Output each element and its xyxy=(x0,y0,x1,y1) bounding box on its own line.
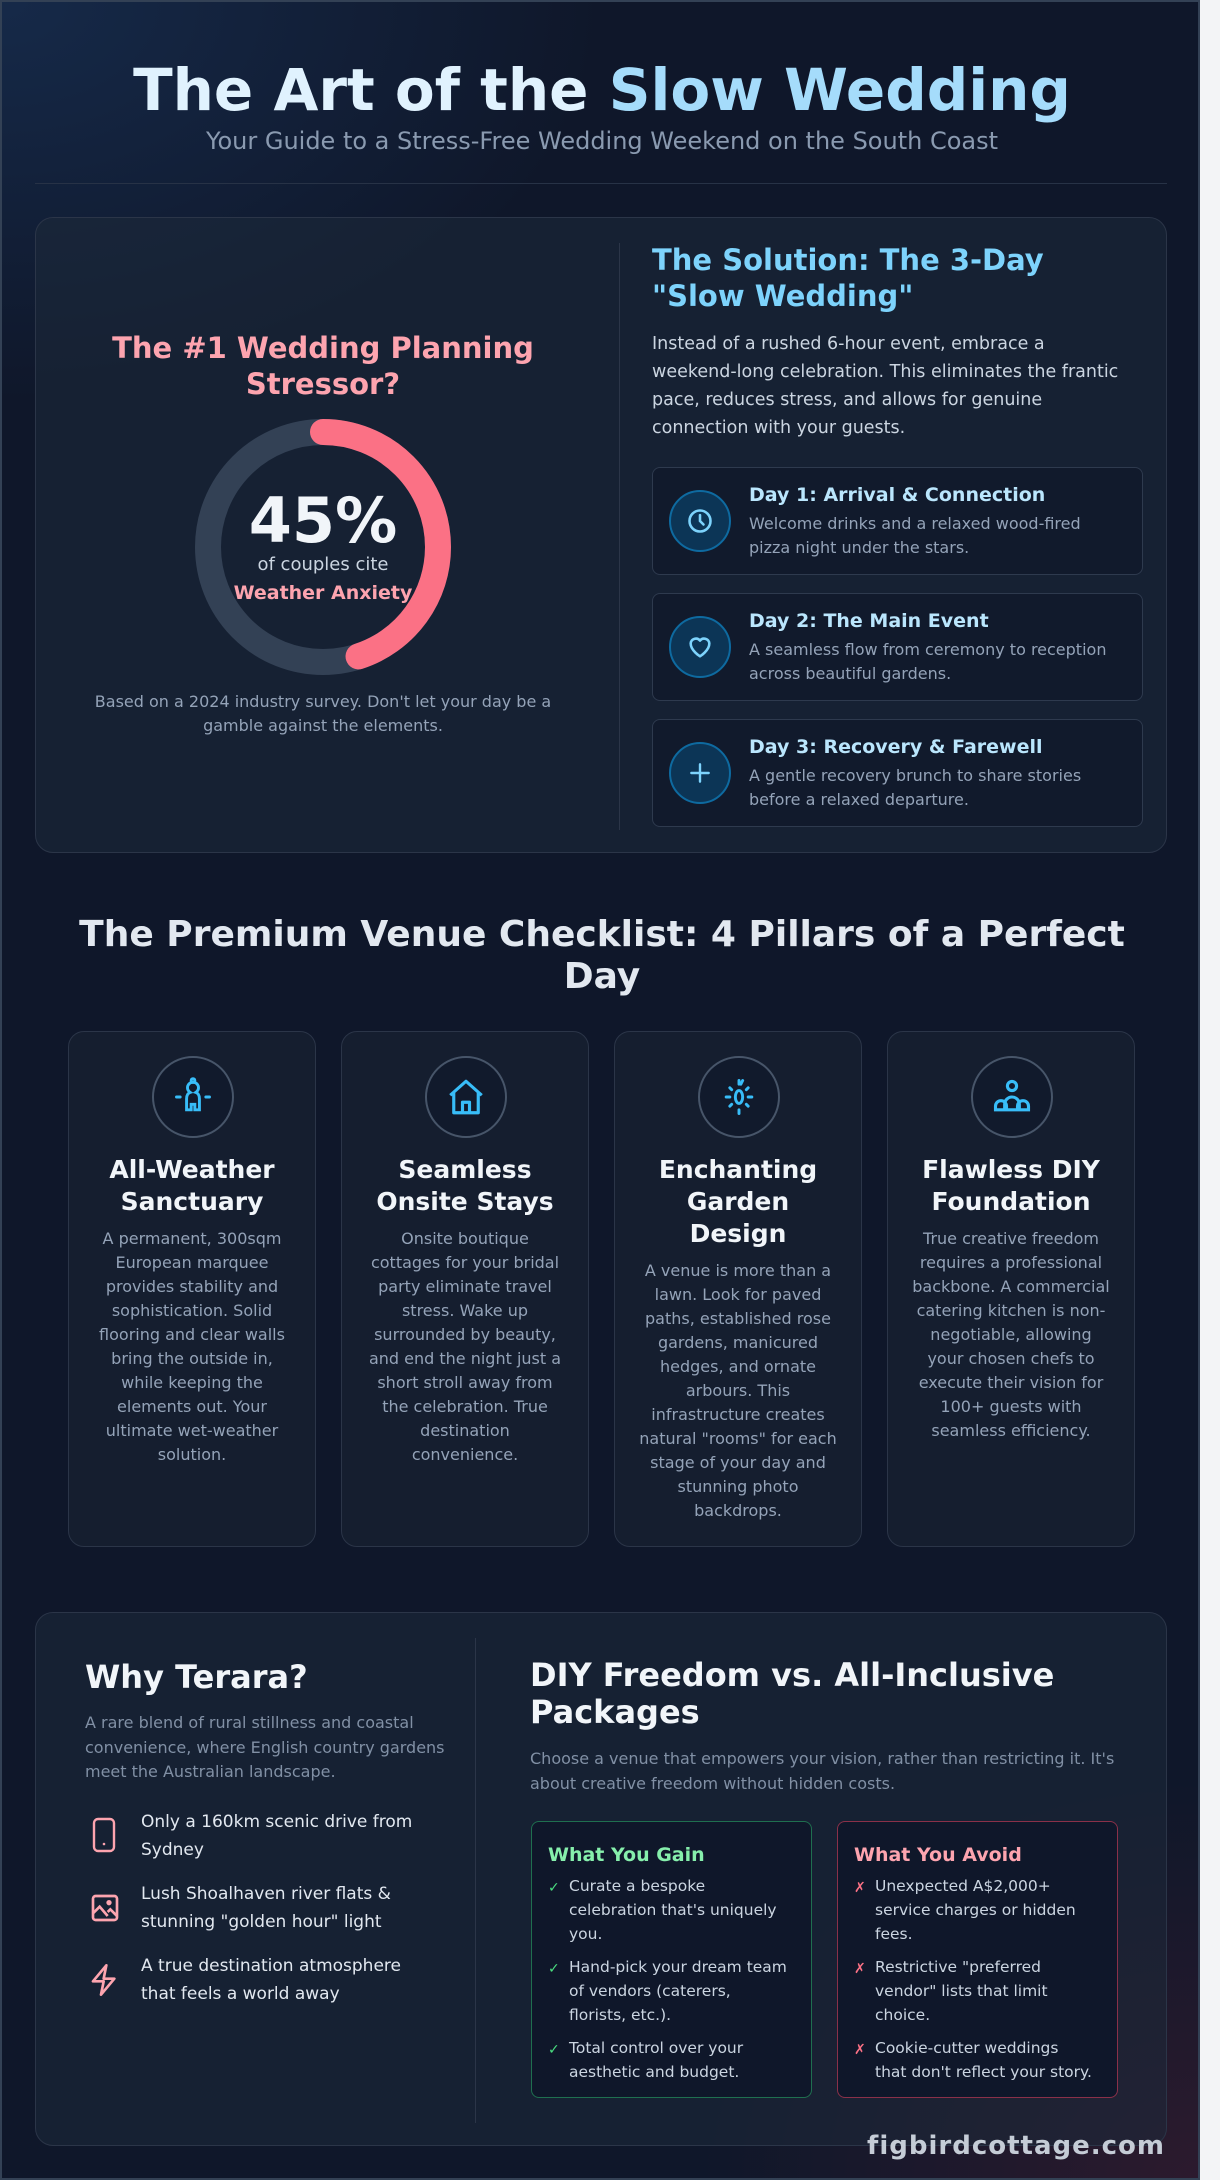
day card 1: Day 1: Arrival & Connection xyxy=(749,484,1045,506)
day card 3 xyxy=(652,719,1143,827)
box: what you gain: ✓ xyxy=(548,1880,560,1896)
box: what you avoid: vendor" lists that limit xyxy=(875,1982,1048,2000)
box: what you avoid: What You Avoid xyxy=(854,1844,1022,1866)
title: The Art of the Slow Wedding xyxy=(133,56,1071,124)
day card 1 xyxy=(652,467,1143,575)
icon: image xyxy=(92,1894,118,1922)
text: solution: Instead of a rushed 6-hour event, embrace a weekend-long celebration. This eliminates the frantic pace, reduces stress, and allows for genuine connection with your guests. xyxy=(652,334,1118,438)
subtitle: Your Guide to a Stress-Free Wedding Weekend on the South Coast xyxy=(206,127,998,155)
box: what you avoid: Unexpected A$2,000+ xyxy=(875,1877,1051,1895)
heading: checklist: The Premium Venue Checklist: 4 Pillars of a Perfect Day xyxy=(79,914,1125,997)
icon: house xyxy=(425,1056,507,1138)
icon: clock xyxy=(669,490,731,552)
box: what you avoid: Cookie-cutter weddings xyxy=(875,2039,1058,2057)
day card 2: Day 2: The Main Event xyxy=(749,610,989,632)
box: what you avoid: service charges or hidden xyxy=(875,1901,1076,1919)
icon: phone xyxy=(92,1818,116,1852)
box: what you gain: Curate a bespoke xyxy=(569,1877,705,1895)
day card 2 xyxy=(652,593,1143,701)
text: DIY: Choose a venue that empowers your vision, rather than restricting it. It's about creative freedom without hidden costs. xyxy=(530,1749,1114,1792)
box: what you avoid: ✗ xyxy=(854,1961,866,1977)
footnote: Based on a 2024 industry survey. Don't let your day be a gamble against the elements. xyxy=(95,692,551,735)
heading: solution: The Solution: The 3-Day "Slow Wedding" xyxy=(652,243,1044,313)
heading: why terara: Why Terara? xyxy=(85,1658,308,1696)
box: what you gain: ✓ xyxy=(548,1961,560,1977)
card: DIY foundation: Flawless DIY Foundation xyxy=(922,1155,1100,1216)
icon: lightning xyxy=(92,1964,116,1996)
day card 3: Day 3: Recovery & Farewell xyxy=(749,736,1043,758)
day card 2: A seamless flow from ceremony to reception across beautiful gardens. xyxy=(749,640,1106,683)
box: what you gain: What You Gain xyxy=(548,1844,705,1866)
card: onsite stays: Seamless Onsite Stays xyxy=(376,1155,554,1216)
box: what you gain: you. xyxy=(569,1925,602,1943)
card: DIY foundation: True creative freedom requires a professional backbone. A commercial catering kitchen is non-negotiable, allowing your chosen chefs to execute their vision for 100+ guests with seamless efficiency. xyxy=(912,1229,1110,1440)
list item: destination: A true destination atmosphere that feels a world away xyxy=(141,1956,401,2004)
card: DIY foundation xyxy=(887,1031,1135,1547)
icon: plus xyxy=(669,742,731,804)
card: onsite stays: Onsite boutique cottages for your bridal party eliminate travel stress. Wake up surrounded by beauty, and end the night just a short stroll away from the celebration. True destination convenience. xyxy=(369,1229,561,1464)
panel: stressor and solution xyxy=(35,217,1167,853)
box: what you gain: Total control over your xyxy=(569,2039,743,2057)
card: garden xyxy=(614,1031,862,1547)
card: garden: A venue is more than a lawn. Look for paved paths, established rose gardens, manicured hedges, and ornate arbours. This infrastructure creates natural "rooms" for each stage of your day and stunning photo backdrops. xyxy=(639,1261,837,1520)
heading: stressor: The #1 Wedding Planning Stressor? xyxy=(112,331,534,401)
box: what you gain: Hand-pick your dream team xyxy=(569,1958,787,1976)
icon: heart xyxy=(669,616,731,678)
text: why terara: A rare blend of rural stillness and coastal convenience, where English country gardens meet the Australian landscape. xyxy=(85,1713,445,1781)
box: what you avoid: fees. xyxy=(875,1925,913,1943)
box: what you gain xyxy=(531,1821,812,2098)
card: all-weather: All-Weather Sanctuary xyxy=(109,1155,275,1216)
box: what you avoid xyxy=(837,1821,1118,2098)
box: what you gain: ✓ xyxy=(548,2042,560,2058)
card: onsite stays xyxy=(341,1031,589,1547)
icon: people xyxy=(971,1056,1053,1138)
box: what you gain: of vendors (caterers, xyxy=(569,1982,731,2000)
box: what you avoid: Restrictive "preferred xyxy=(875,1958,1041,1976)
day card 3: A gentle recovery brunch to share stories before a relaxed departure. xyxy=(749,766,1081,809)
day card 1: Welcome drinks and a relaxed wood-fired pizza night under the stars. xyxy=(749,514,1081,557)
box: what you gain: aesthetic and budget. xyxy=(569,2063,739,2081)
heading: DIY freedom: DIY Freedom vs. All-Inclusive Packages xyxy=(530,1656,1054,1731)
stat: 45% xyxy=(234,484,412,604)
list item: river flats: Lush Shoalhaven river flats & stunning "golden hour" light xyxy=(141,1884,391,1932)
box: what you avoid: ✗ xyxy=(854,2042,866,2058)
card: garden: Enchanting Garden Design xyxy=(659,1155,817,1248)
icon: garden light xyxy=(698,1056,780,1138)
donut chart 45% xyxy=(195,419,451,675)
box: what you gain: celebration that's uniquely xyxy=(569,1901,777,1919)
card: all-weather xyxy=(68,1031,316,1547)
panel: why terara & DIY xyxy=(35,1612,1167,2146)
icon: shelter xyxy=(152,1056,234,1138)
footer: website: figbirdcottage.com xyxy=(867,2131,1165,2161)
box: what you gain: florists, etc.). xyxy=(569,2006,671,2024)
box: what you avoid: ✗ xyxy=(854,1880,866,1896)
box: what you avoid: that don't reflect your story. xyxy=(875,2063,1092,2081)
stat: 45%: of couples cite xyxy=(257,554,389,575)
list item: drive: Only a 160km scenic drive from Sydney xyxy=(141,1812,412,1860)
box: what you avoid: choice. xyxy=(875,2006,930,2024)
card: all-weather: A permanent, 300sqm European marquee provides stability and sophistication. Solid flooring and clear walls bring the outside in, while keeping the elements out. Your ultimate wet-weather solution. xyxy=(99,1229,285,1464)
stat: 45%: 45% xyxy=(249,484,397,557)
stat: 45%: Weather Anxiety xyxy=(234,582,412,604)
